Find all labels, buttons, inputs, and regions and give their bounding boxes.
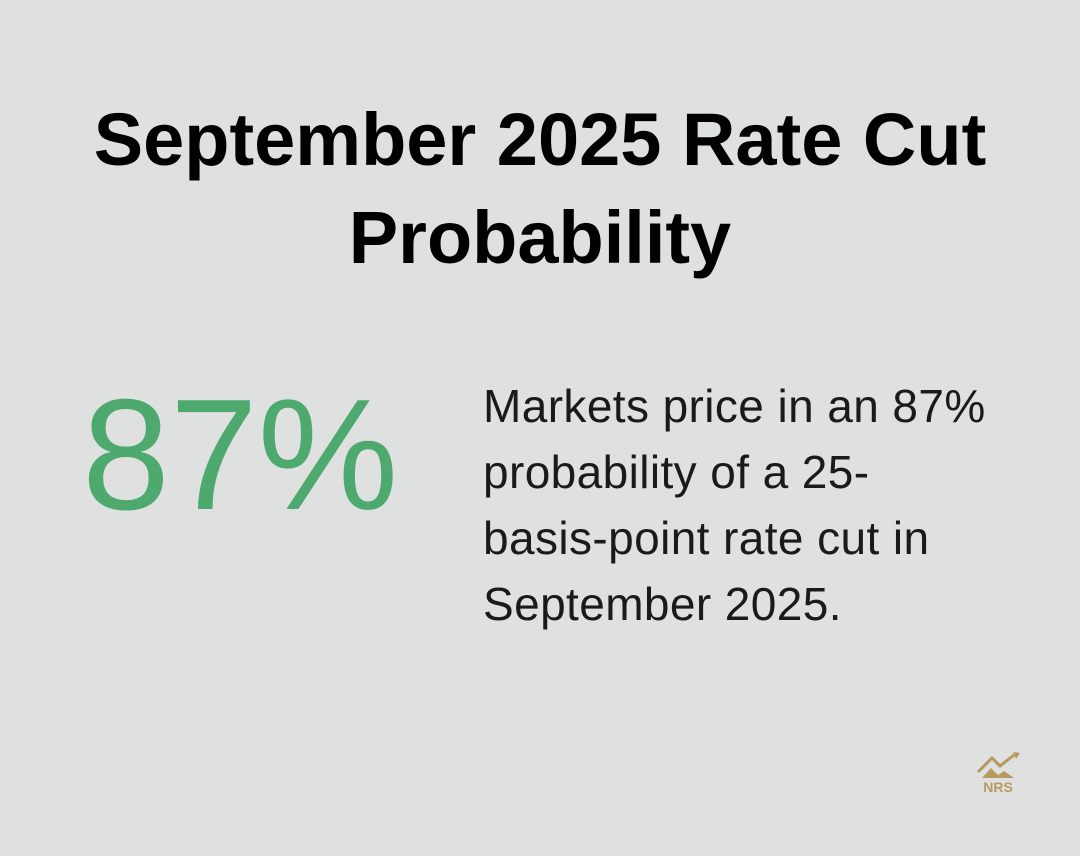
description text: Markets price in an 87% bbox=[483, 380, 986, 432]
description text: September 2025. bbox=[483, 578, 842, 630]
big stat: 87%: 87% bbox=[82, 367, 398, 543]
title: September 2025 Rate Cut bbox=[94, 98, 986, 181]
title bbox=[94, 98, 986, 279]
logo: NRS bbox=[977, 752, 1020, 794]
description text: basis-point rate cut in bbox=[483, 512, 929, 564]
description text bbox=[483, 380, 986, 630]
description text: probability of a 25- bbox=[483, 446, 869, 498]
title: Probability bbox=[349, 196, 731, 279]
